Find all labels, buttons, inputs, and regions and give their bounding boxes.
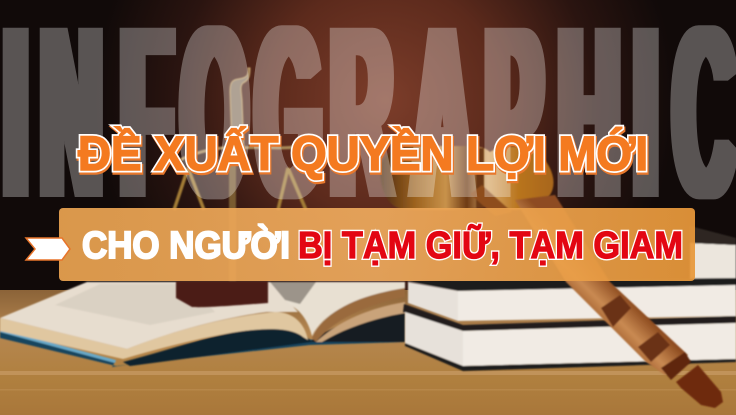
icon: scales of justice bbox=[174, 68, 306, 282]
handle collar bbox=[661, 352, 691, 380]
handle end knob bbox=[676, 365, 723, 408]
icon: gavel handle bbox=[515, 195, 723, 408]
banner band bbox=[59, 208, 695, 281]
handle dark rings bbox=[601, 295, 631, 327]
background: dark wall with warm glow bbox=[0, 0, 736, 300]
arrow marker bbox=[26, 238, 70, 260]
bottom book bbox=[403, 304, 736, 331]
title line two: red part: BỊ TẠM GIỮ, TẠM GIAM bbox=[298, 223, 683, 267]
middle book bbox=[406, 278, 736, 291]
top book bbox=[690, 243, 736, 280]
table surface bbox=[0, 290, 736, 415]
icon: gavel head bbox=[380, 146, 554, 216]
scale base block bbox=[176, 281, 268, 307]
page edge bbox=[0, 312, 308, 359]
title line two: red part: BỊ TẠM GIỮ, TẠM GIAM bbox=[298, 223, 683, 267]
left page bbox=[0, 282, 298, 349]
title line one: ĐỀ XUẤT QUYỀN LỢI MỚI bbox=[78, 126, 648, 181]
book cover bbox=[0, 330, 405, 367]
title line two: white part: CHO NGƯỜI bbox=[82, 223, 290, 267]
stacked law books bbox=[403, 226, 736, 371]
title line one: ĐỀ XUẤT QUYỀN LỢI MỚI bbox=[78, 126, 648, 181]
open book bbox=[0, 282, 405, 367]
right page bbox=[270, 282, 405, 336]
title line one: ĐỀ XUẤT QUYỀN LỢI MỚI bbox=[79, 128, 649, 183]
